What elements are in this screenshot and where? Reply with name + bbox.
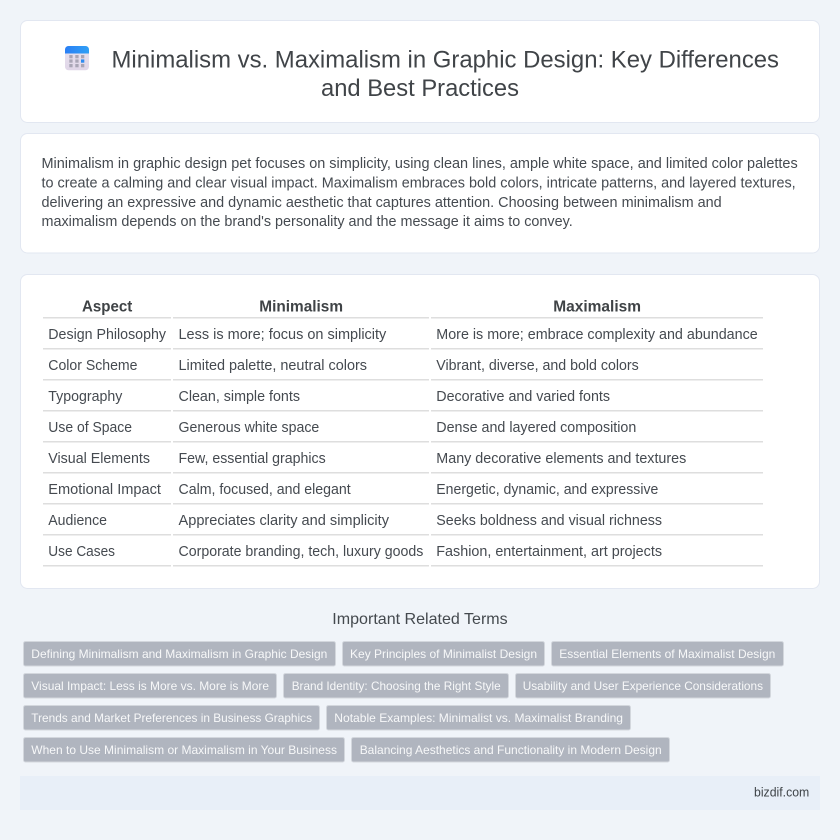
table row: emotional impact xyxy=(43,482,763,504)
tag xyxy=(352,738,670,762)
table row: color scheme: Color Scheme xyxy=(48,358,137,374)
tag xyxy=(24,706,320,730)
heading: important related terms: Important Related Terms xyxy=(332,611,508,628)
tag xyxy=(552,642,784,666)
table row: typography: Clean, simple fonts xyxy=(178,389,300,405)
panel: comparison table xyxy=(20,274,820,588)
table row: emotional impact: Emotional Impact xyxy=(48,482,161,498)
tag xyxy=(326,706,630,730)
tag: Key Principles of Minimalist Design xyxy=(350,647,537,661)
table row: audience: Audience xyxy=(48,513,107,529)
table row: audience: Appreciates clarity and simplicity xyxy=(178,513,390,529)
tag xyxy=(24,642,336,666)
table header row: Minimalism xyxy=(259,299,343,316)
tag xyxy=(342,642,544,666)
text block: introduction paragraph: Minimalism in graphic design pet focuses on simplicity, using clean lines, ample white space, and limited color palettes xyxy=(42,156,798,172)
table row: typography: Typography xyxy=(48,389,123,405)
table row: use of space: Use of Space xyxy=(48,420,132,436)
table row: use of space xyxy=(43,420,763,442)
title xyxy=(112,46,779,102)
text block: introduction paragraph xyxy=(42,156,798,230)
table row: emotional impact: Calm, focused, and elegant xyxy=(178,482,351,498)
table row: color scheme: Limited palette, neutral colors xyxy=(178,358,367,374)
footer: bizdif.com xyxy=(754,786,809,800)
table header row xyxy=(43,299,763,318)
table row: use cases: Fashion, entertainment, art projects xyxy=(436,544,662,560)
tag: When to Use Minimalism or Maximalism in Your Business xyxy=(31,743,337,757)
tag: Brand Identity: Choosing the Right Style xyxy=(292,679,501,693)
table row: use cases xyxy=(43,544,763,566)
text block: introduction paragraph: to create a calming and clear visual impact. Maximalism embraces bold colors, intricate patterns, and layered textures, xyxy=(42,176,796,192)
table row: design philosophy: Less is more; focus on simplicity xyxy=(178,327,387,343)
title: Minimalism vs. Maximalism in Graphic Design: Key Differences xyxy=(112,46,779,74)
tag xyxy=(24,738,344,762)
icon: calendar xyxy=(65,46,89,70)
table header row: Maximalism xyxy=(553,299,641,316)
table row: typography xyxy=(43,389,763,412)
text block: introduction paragraph: delivering an expressive and dynamic aesthetic that captures attention. Choosing between minimalism and xyxy=(42,195,722,211)
table row: design philosophy xyxy=(43,327,763,350)
tag xyxy=(516,674,770,698)
table row: use cases: Use Cases xyxy=(48,544,115,560)
tag: Usability and User Experience Considerations xyxy=(523,679,763,693)
table row: visual elements: Few, essential graphics xyxy=(178,451,326,467)
table row: audience: Seeks boldness and visual richness xyxy=(436,513,662,529)
table row: design philosophy: More is more; embrace complexity and abundance xyxy=(436,327,758,343)
tag: Essential Elements of Maximalist Design xyxy=(559,647,775,661)
table row: design philosophy: Design Philosophy xyxy=(48,327,167,343)
tag group: related terms xyxy=(24,642,784,762)
table row: use cases: Corporate branding, tech, luxury goods xyxy=(178,544,423,560)
table row: emotional impact: Energetic, dynamic, and expressive xyxy=(436,482,658,498)
table row: typography: Decorative and varied fonts xyxy=(436,389,610,405)
tag: Trends and Market Preferences in Business Graphics xyxy=(31,711,312,725)
table row: use of space: Generous white space xyxy=(178,420,319,436)
table row: visual elements xyxy=(43,451,763,474)
title: and Best Practices xyxy=(321,75,519,102)
footer xyxy=(20,776,820,810)
tag xyxy=(24,674,276,698)
table header row: Aspect xyxy=(82,299,133,316)
table row: visual elements: Many decorative elements and textures xyxy=(436,451,686,467)
tag: Notable Examples: Minimalist vs. Maximalist Branding xyxy=(334,711,623,725)
text block: introduction paragraph: maximalism depends on the brand's personality and the message it aims to convey. xyxy=(42,214,573,230)
tag: Balancing Aesthetics and Functionality in Modern Design xyxy=(360,743,662,757)
tag: Visual Impact: Less is More vs. More is More xyxy=(31,679,269,693)
table row: color scheme xyxy=(43,358,763,380)
panel: title header xyxy=(20,20,820,122)
table row: visual elements: Visual Elements xyxy=(48,451,150,467)
table row: color scheme: Vibrant, diverse, and bold colors xyxy=(436,358,639,374)
table row: audience xyxy=(43,513,763,536)
tag: Defining Minimalism and Maximalism in Graphic Design xyxy=(31,647,327,661)
table row: use of space: Dense and layered composition xyxy=(436,420,636,436)
panel: introduction xyxy=(20,134,820,253)
tag xyxy=(284,674,508,698)
